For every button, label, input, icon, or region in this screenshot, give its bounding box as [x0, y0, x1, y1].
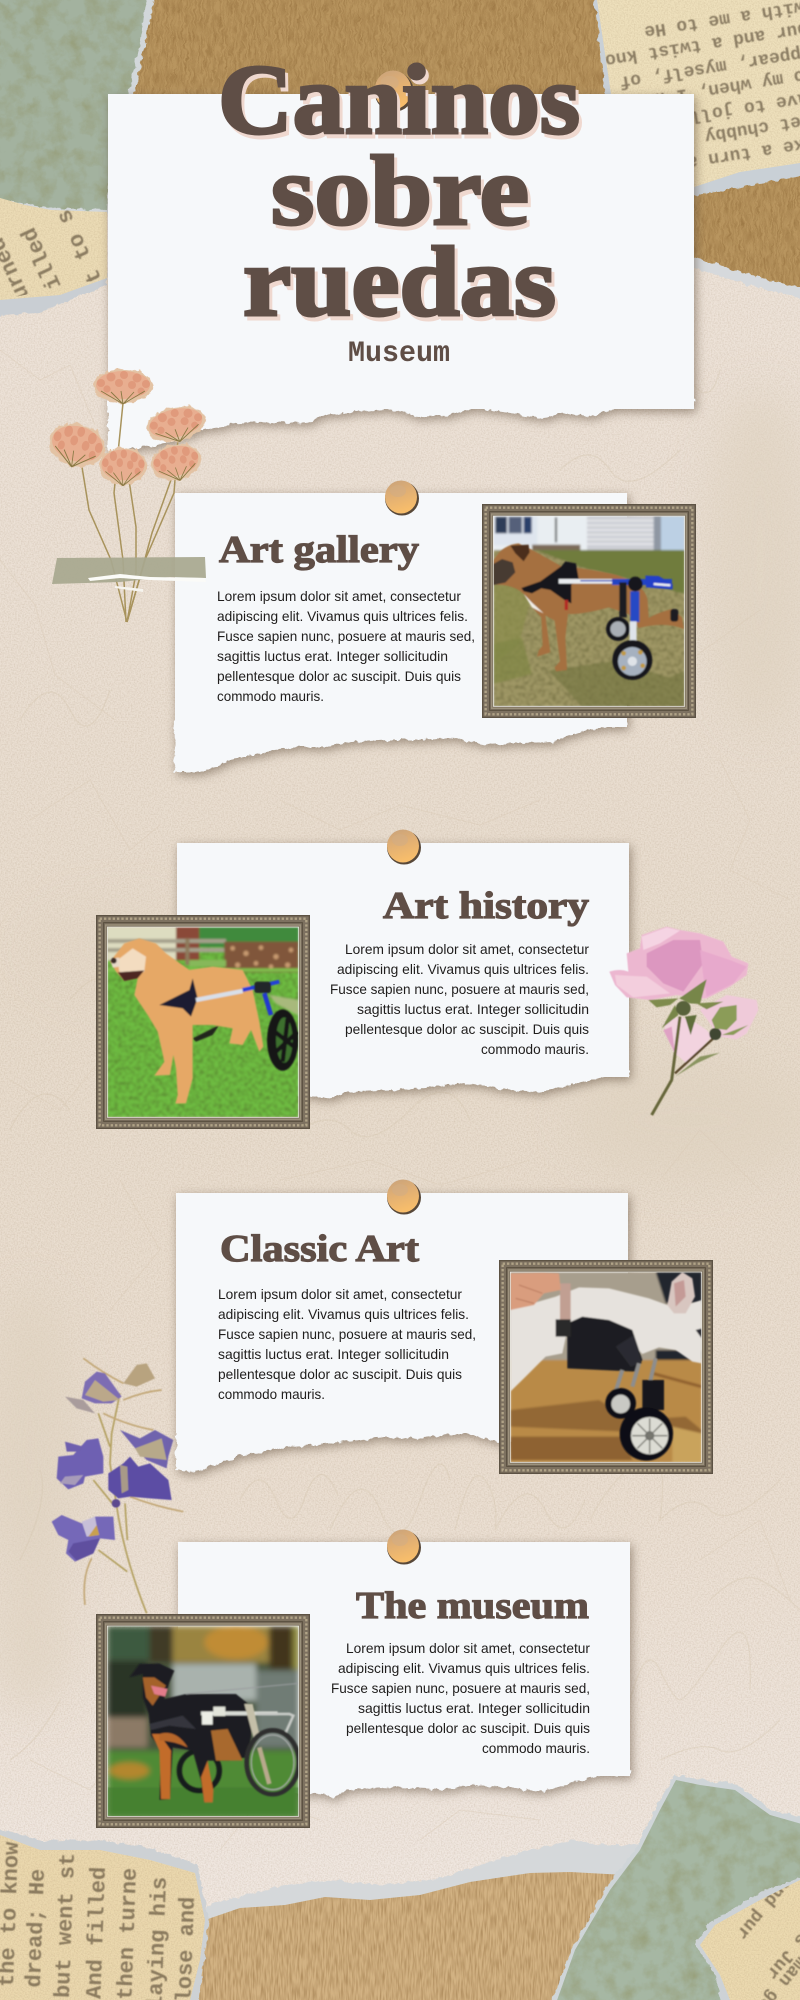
framed photo: black and tan dog in wheelchair	[96, 1614, 310, 1828]
newspaper scrap: top left: st to s	[52, 205, 114, 299]
text: classic art body	[218, 1286, 476, 1402]
paper: classic art	[176, 1193, 628, 1472]
title paper sheet	[108, 94, 694, 453]
paper: art history	[177, 843, 629, 1105]
text: art gallery body: sagittis luctus erat. Integer sollicitudin	[217, 648, 448, 664]
torn paper collage: bottom	[0, 1775, 800, 2000]
paper: the museum	[178, 1542, 630, 1800]
text: classic art body: Lorem ipsum dolor sit amet, consectetur	[218, 1286, 462, 1302]
text: classic art body: commodo mauris.	[218, 1386, 325, 1402]
pin: the museum	[387, 1530, 421, 1564]
text: the museum body	[331, 1640, 590, 1756]
pin: art gallery	[385, 480, 419, 516]
title: Caninos sobre ruedas: ruedas	[246, 230, 559, 341]
panel: art gallery	[174, 480, 696, 772]
panel: classic art	[176, 1180, 713, 1474]
pin: title	[375, 71, 414, 112]
text: the museum body: sagittis luctus erat. Integer sollicitudin	[358, 1700, 590, 1716]
text: the museum body: Fusce sapien nunc, posuere at mauris sed,	[331, 1680, 590, 1696]
newspaper scrap: bottom left: And filled	[82, 1866, 112, 1999]
framed photo: small white dog in wheelchair	[499, 1260, 713, 1474]
newspaper scrap: top right	[589, 0, 800, 196]
title: Caninos sobre ruedas: Caninos	[218, 44, 580, 155]
text: art gallery body: Lorem ipsum dolor sit amet, consectetur	[217, 588, 461, 604]
kraft paper: bottom	[185, 1872, 625, 2000]
text: classic art body: pellentesque dolor ac suscipit. Duis quis	[218, 1366, 462, 1382]
paper: art gallery	[174, 493, 627, 772]
text: art history body: pellentesque dolor ac suscipit. Duis quis	[345, 1021, 589, 1037]
flower stems	[82, 403, 178, 622]
title: Caninos sobre ruedas: Caninos	[221, 48, 583, 159]
newspaper scrap: bottom right	[695, 1866, 800, 2000]
text: classic art body: sagittis luctus erat. Integer sollicitudin	[218, 1346, 449, 1362]
green paper: bottom right	[545, 1775, 800, 2000]
text: art history body: Lorem ipsum dolor sit amet, consectetur	[345, 941, 589, 957]
heading: Art gallery: Art gallery	[219, 529, 419, 571]
text: art history body: adipiscing elit. Vivamus quis ultrices felis.	[337, 961, 589, 977]
green paper: top left	[0, 0, 157, 214]
title: Caninos sobre ruedas: sobre	[271, 135, 529, 246]
text: the museum body: commodo mauris.	[482, 1740, 590, 1756]
newspaper scrap: top left: filled	[17, 223, 73, 306]
title: Caninos sobre ruedas	[218, 44, 583, 341]
newspaper scrap: bottom left: but went st	[51, 1852, 81, 1998]
text: art history body: sagittis luctus erat. Integer sollicitudin	[357, 1001, 589, 1017]
newspaper scrap: top left	[0, 198, 114, 318]
panel: the museum	[96, 1530, 630, 1828]
dried orange flowers	[44, 369, 209, 622]
text: art history body: Fusce sapien nunc, posuere at mauris sed,	[330, 981, 589, 997]
panel: art history	[96, 830, 629, 1129]
pink rose	[609, 927, 758, 1115]
text: the museum body: adipiscing elit. Vivamus quis ultrices felis.	[338, 1660, 590, 1676]
subtitle: Museum: Museum	[348, 337, 450, 371]
pin: classic art	[387, 1180, 421, 1214]
heading: Art history: Art history	[383, 885, 589, 927]
pin: art history	[387, 830, 421, 864]
heading: Classic Art: Classic Art	[220, 1228, 419, 1270]
framed photo: boxer in wheelchair	[482, 504, 696, 718]
text: art gallery body: adipiscing elit. Vivamus quis ultrices felis.	[217, 608, 468, 624]
grey torn layer: bottom	[207, 1840, 650, 1930]
text: art gallery body	[217, 588, 475, 704]
title: Caninos sobre ruedas: sobre	[274, 139, 532, 250]
text: art gallery body: Fusce sapien nunc, posuere at mauris sed,	[217, 628, 475, 644]
text: art gallery body: commodo mauris.	[217, 688, 324, 704]
text: art history body: commodo mauris.	[481, 1041, 589, 1057]
newspaper scrap: bottom right: and pur	[731, 1872, 795, 1943]
purple flowers	[52, 1358, 183, 1613]
kraft paper: top	[120, 0, 800, 306]
newspaper scrap: bottom left	[0, 1822, 209, 2000]
title: Caninos sobre ruedas: ruedas	[243, 226, 556, 337]
text: classic art body: Fusce sapien nunc, posuere at mauris sed,	[218, 1326, 476, 1342]
washi tape	[52, 557, 206, 592]
text: art gallery body: pellentesque dolor ac suscipit. Duis quis	[217, 668, 461, 684]
text: the museum body: Lorem ipsum dolor sit amet, consectetur	[346, 1640, 590, 1656]
newspaper scrap: bottom left: then turne	[113, 1867, 143, 2000]
text: classic art body: adipiscing elit. Vivamus quis ultrices felis.	[218, 1306, 469, 1322]
flower heads	[44, 369, 209, 486]
heading: The museum: The museum	[356, 1585, 589, 1627]
text: the museum body: pellentesque dolor ac suscipit. Duis quis	[346, 1720, 590, 1736]
framed photo: golden retriever in wheelchair	[96, 915, 310, 1129]
text: art history body	[330, 941, 589, 1057]
torn paper collage: top	[0, 0, 800, 318]
